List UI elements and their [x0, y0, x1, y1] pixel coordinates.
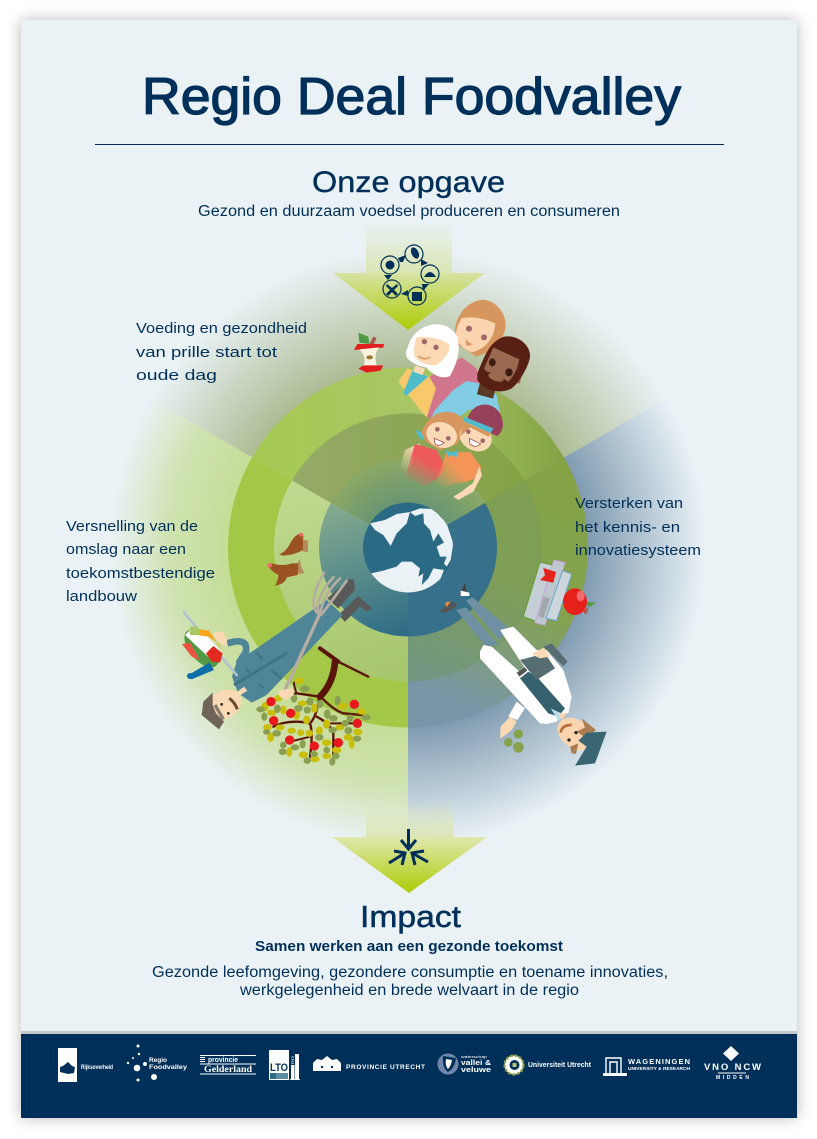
logo: Provincie Utrecht [313, 1056, 425, 1071]
text: landbouw: Versnelling van de [66, 518, 198, 535]
logo: VNO NCW Midden: MIDDEN [716, 1075, 749, 1081]
text: voeding en gezondheid [136, 320, 307, 384]
logo: Wageningen University & Research [603, 1057, 690, 1076]
person: old woman [398, 324, 459, 417]
text: impact description: Gezonde leefomgeving, gezondere consumptie en toename innovaties, [152, 964, 668, 981]
title: Regio Deal Foodvalley [142, 68, 681, 126]
heading: impact: Impact [360, 899, 461, 934]
icon: apple tree [257, 648, 370, 765]
logo: VNO NCW Midden [704, 1046, 761, 1081]
text: kennis en innovatie: Versterken van [575, 495, 683, 512]
text: landbouw [66, 518, 215, 605]
icon: apple core [354, 333, 384, 373]
text: kennis en innovatie: het kennis- en [575, 519, 680, 536]
illustration: farmer, chickens and tree [178, 533, 372, 765]
segment: voeding en gezondheid [159, 263, 657, 525]
text: kennis en innovatie [575, 495, 701, 559]
text: landbouw: toekomstbestendige [66, 565, 215, 582]
text: impact description [152, 964, 668, 999]
logo: provincie Gelderland: provincie [208, 1057, 238, 1064]
central wheel diagram [110, 250, 706, 846]
subheading: impact: Samen werken aan een gezonde toekomst [255, 938, 563, 955]
text: landbouw: landbouw [66, 588, 137, 605]
logo: Wageningen University & Research: UNIVERSITY & RESEARCH [628, 1066, 690, 1071]
segment: kennis en innovatie [408, 404, 696, 832]
logo: Universiteit Utrecht [504, 1056, 592, 1074]
logo: Regio Foodvalley: Regio [149, 1057, 167, 1064]
icon: plate of food [178, 613, 237, 679]
person: blue shirt [429, 381, 501, 422]
arrow: bottom output [332, 800, 487, 893]
logo: provincie Gelderland: Gelderland [204, 1065, 253, 1075]
icon: stacked books [523, 560, 572, 625]
logo: Rijksoverheid: Rijksoverheid [81, 1065, 113, 1071]
logo: Vallei en Veluwe: vallei & [461, 1058, 492, 1067]
logo: Vallei en Veluwe: waterschap [461, 1055, 487, 1059]
icon: chickens [267, 533, 308, 586]
logo: Wageningen University & Research: WAGENINGEN [628, 1057, 690, 1066]
person: scientist [439, 583, 607, 766]
person: girl [399, 412, 465, 487]
logo: Regio Foodvalley [127, 1044, 187, 1082]
icon: food cycle [381, 245, 439, 305]
text: voeding en gezondheid: Voeding en gezondheid [136, 320, 307, 337]
icon: red apple [563, 588, 596, 615]
logo: Vallei en Veluwe: veluwe [461, 1065, 491, 1074]
heading: onze opgave: Onze opgave [312, 166, 505, 199]
logo: LTO Noord [269, 1050, 300, 1080]
footer band [21, 1031, 797, 1034]
logo: Vallei en Veluwe [438, 1054, 492, 1074]
logo: Universiteit Utrecht: Universiteit Utrecht [528, 1062, 592, 1069]
text: landbouw: omslag naar een [66, 541, 186, 558]
icon: converging arrows [389, 829, 428, 865]
logo: Rijksoverheid [58, 1048, 113, 1082]
illustration: scientist with books [439, 560, 607, 766]
person: bearded man [477, 336, 530, 399]
logo: VNO NCW Midden: VNO NCW [704, 1062, 761, 1073]
arrow: top input [333, 222, 485, 330]
person: boy with cap [435, 405, 503, 500]
illustration: family group [354, 300, 530, 500]
logo: provincie Gelderland [200, 1055, 256, 1075]
text: voeding en gezondheid: oude dag [136, 367, 217, 384]
text: voeding en gezondheid: van prille start tot [136, 344, 278, 361]
logo: LTO Noord: NOORD [290, 1056, 295, 1078]
logo: Provincie Utrecht: PROVINCIE UTRECHT [346, 1064, 425, 1071]
person: farmer [200, 579, 372, 729]
icon: fork [278, 573, 347, 700]
subheading: onze opgave: Gezond en duurzaam voedsel produceren en consumeren [198, 203, 620, 220]
logo: LTO Noord: LTO [270, 1062, 288, 1074]
logo: Regio Foodvalley: Foodvalley [149, 1064, 187, 1071]
icon: globe [363, 502, 453, 593]
text: impact description: werkgelegenheid en brede welvaart in de regio [239, 982, 579, 999]
person: pink shirt [426, 357, 479, 418]
segment: landbouw [117, 402, 408, 836]
person: ginger woman [455, 300, 506, 357]
text: kennis en innovatie: innovatiesysteem [575, 542, 701, 559]
